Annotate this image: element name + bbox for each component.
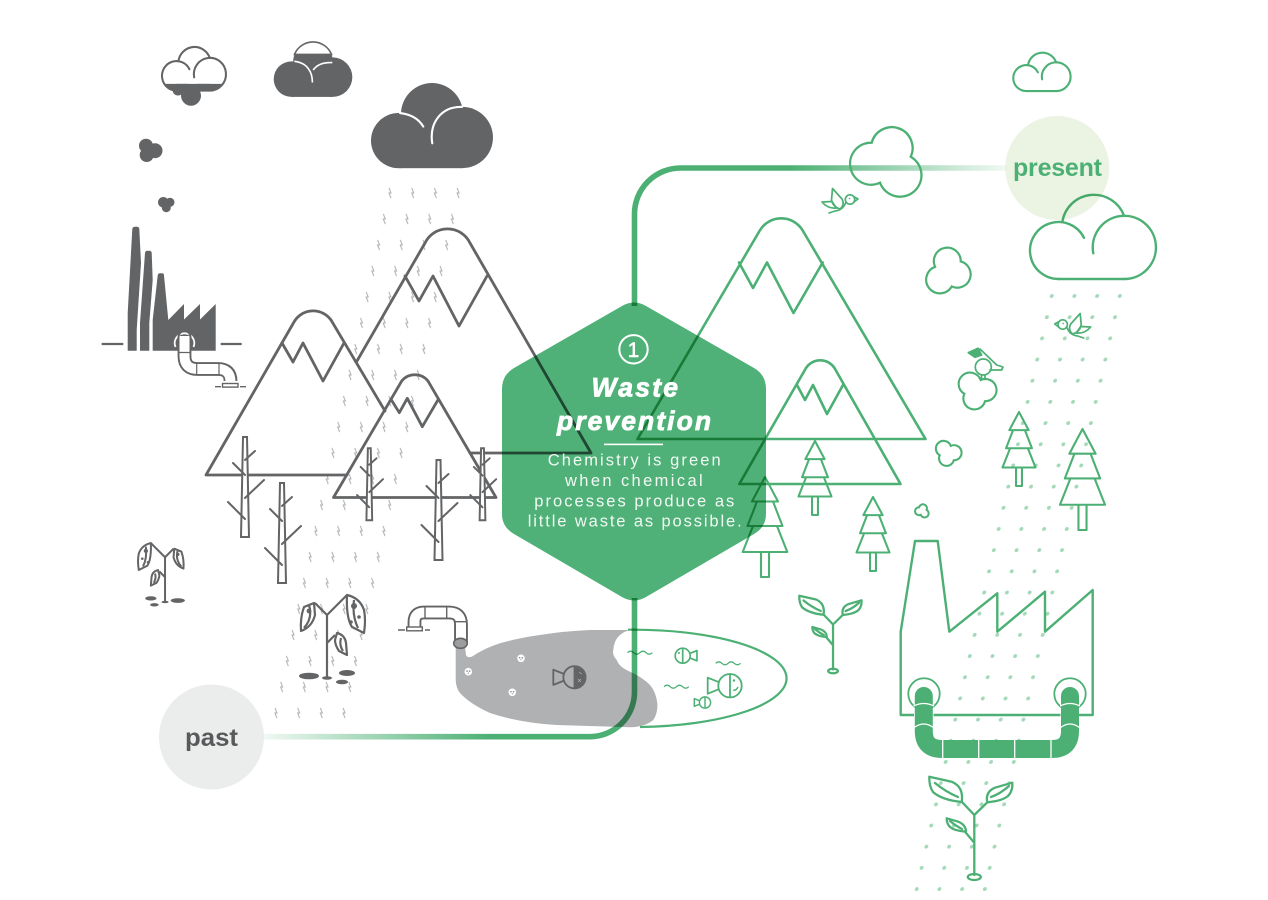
divider bbox=[604, 444, 663, 445]
pine trees: present bbox=[743, 412, 1105, 577]
pipe: grey outflow into pond bbox=[398, 607, 467, 648]
pond: polluted grey water bbox=[456, 630, 657, 727]
body text: Chemistry is green bbox=[548, 452, 721, 470]
mountains: past, grey bbox=[206, 229, 591, 497]
puffs: clean green smoke bbox=[850, 127, 997, 517]
body text: little waste as possible. bbox=[528, 513, 742, 531]
mountains: present, green bbox=[638, 218, 926, 484]
circle: present label: present bbox=[1013, 154, 1103, 182]
body text bbox=[528, 452, 742, 531]
circle: past label bbox=[159, 684, 264, 790]
factory: past, grey with chimneys bbox=[102, 227, 246, 387]
plants: healthy green sprouts bbox=[799, 596, 1012, 880]
perched bird bbox=[968, 348, 1003, 380]
heading: Waste bbox=[592, 373, 678, 403]
fish and ripples in clean water bbox=[628, 648, 742, 708]
body text: when chemical bbox=[564, 472, 703, 490]
dead fish in polluted water bbox=[553, 666, 586, 688]
panel: central hexagon bbox=[502, 302, 766, 600]
circle: present label bbox=[1005, 116, 1109, 220]
dead trees: past bbox=[228, 437, 496, 583]
smoke puffs: past bbox=[139, 139, 174, 212]
heading: prevention bbox=[556, 406, 711, 436]
pond: clean water outline bbox=[628, 630, 787, 727]
factory: present, green outline with clean pipe bbox=[901, 541, 1093, 758]
cloud: fully polluted, big bbox=[371, 83, 493, 168]
hexagon content: number, heading, body bbox=[528, 335, 742, 531]
circle: past label: past bbox=[185, 724, 239, 752]
rain: polluted rain falling from the grey cloud bbox=[262, 180, 472, 726]
skulls in polluted water bbox=[464, 654, 525, 696]
heading bbox=[556, 373, 711, 436]
pipe from grey factory bbox=[175, 331, 246, 387]
factory pipe bbox=[908, 678, 1086, 758]
dead plants: past bbox=[138, 543, 365, 684]
rain: green clean dots falling from the present cloud bbox=[903, 285, 1134, 900]
drip under first cloud bbox=[172, 84, 201, 106]
number badge bbox=[619, 335, 648, 363]
number badge: 1 bbox=[628, 339, 639, 362]
birds: present bbox=[822, 188, 1091, 380]
cloud: large right bbox=[1030, 195, 1156, 279]
connector: line from hexagon up to present bbox=[634, 168, 1006, 306]
cloud: small top right bbox=[1013, 53, 1071, 91]
cloud: mostly clean, grey underside bbox=[162, 45, 226, 91]
clouds: past, grey, increasingly polluted bbox=[162, 42, 493, 168]
clouds: present, green outline bbox=[1013, 53, 1156, 279]
body text: processes produce as bbox=[534, 493, 734, 511]
connector: line from hexagon down to past bbox=[263, 598, 634, 737]
cloud: half polluted bbox=[274, 42, 352, 97]
